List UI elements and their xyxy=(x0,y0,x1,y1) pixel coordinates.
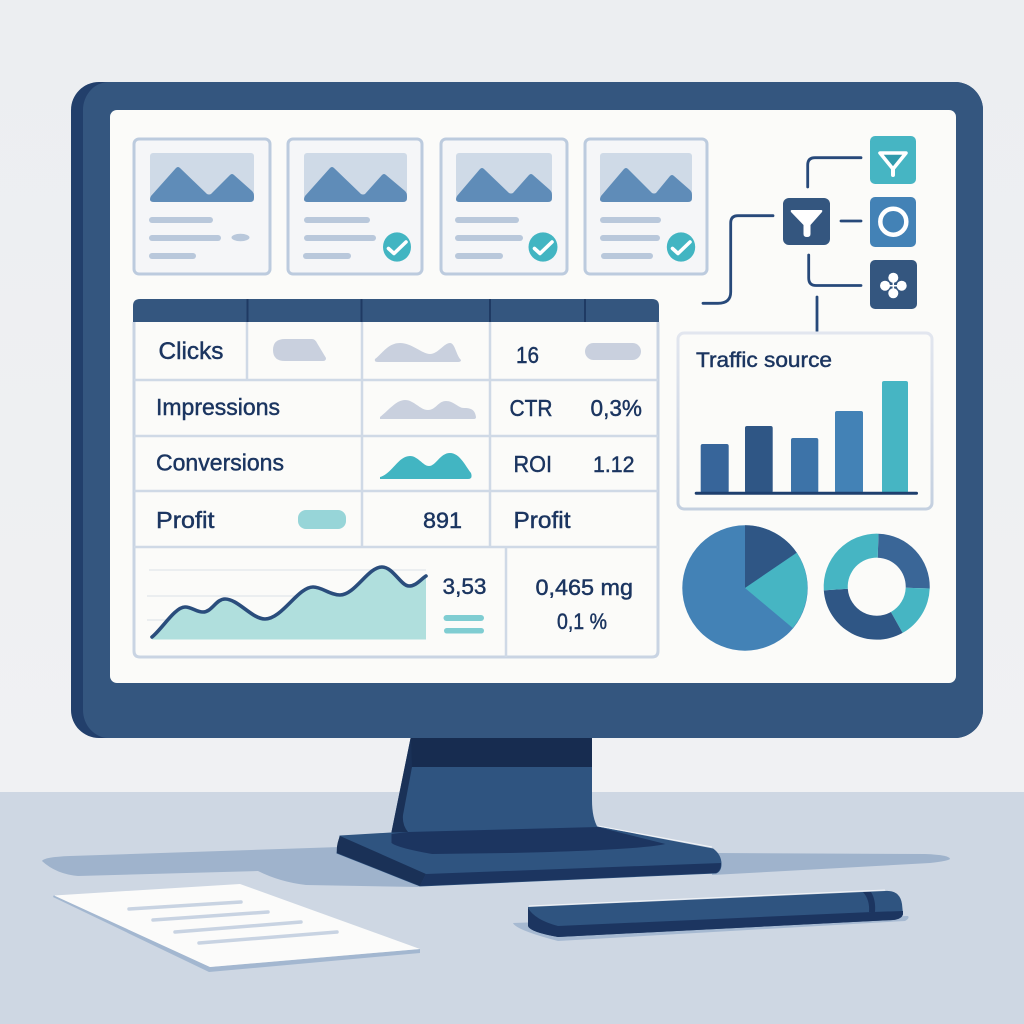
table outline xyxy=(134,322,658,657)
check badge xyxy=(383,232,411,262)
row: Profit: Profit xyxy=(156,507,215,533)
chart axis xyxy=(695,492,918,495)
mountains xyxy=(600,168,692,202)
teal pill xyxy=(298,510,346,529)
check badge xyxy=(528,232,558,262)
row: Profit: Profit xyxy=(514,507,571,533)
teal sparkline xyxy=(380,453,472,479)
icon: teal filter xyxy=(870,136,916,184)
row: Clicks: Clicks xyxy=(158,338,224,365)
row: Profit: 891 xyxy=(423,508,462,533)
text lines xyxy=(455,217,523,259)
pen dark lower side xyxy=(528,908,903,937)
image card 2 xyxy=(288,139,422,274)
mountains xyxy=(304,167,407,202)
row: Profit xyxy=(156,507,571,533)
chart gridlines xyxy=(147,570,426,620)
row: Impressions: CTR xyxy=(510,395,552,421)
text lines xyxy=(149,217,250,259)
stand neck xyxy=(391,736,598,840)
metrics table xyxy=(133,299,659,657)
icon: blue circle xyxy=(870,197,916,247)
row: Conversions: Conversions xyxy=(156,450,284,476)
table grid xyxy=(134,322,658,657)
summary values xyxy=(536,575,633,634)
pen shadow xyxy=(513,916,909,941)
base left face xyxy=(337,836,426,886)
chart area xyxy=(152,567,426,640)
panel: traffic source bar chart xyxy=(678,333,932,509)
text lines xyxy=(600,217,661,259)
image card 1 xyxy=(134,139,270,274)
sparkline xyxy=(375,343,461,362)
chart value xyxy=(442,574,486,634)
base cast shadow xyxy=(392,827,666,854)
legend bars xyxy=(444,615,484,634)
row: Conversions: 1.12 xyxy=(593,452,634,477)
pill placeholder xyxy=(585,343,641,360)
row: Impressions: 0,3% xyxy=(590,395,642,421)
summary values: 0,1 % xyxy=(557,609,607,634)
monitor frame xyxy=(71,82,983,738)
table header bar xyxy=(133,299,659,322)
paper edge xyxy=(53,895,420,972)
chart line xyxy=(152,567,426,637)
sparkline xyxy=(380,400,476,419)
bars xyxy=(701,381,908,493)
pen cap band xyxy=(863,892,875,912)
screen xyxy=(110,110,956,683)
paper document on desk xyxy=(53,884,420,972)
wall background xyxy=(0,0,1024,792)
pen body xyxy=(528,891,903,937)
neck left edge xyxy=(392,736,412,840)
icon: central funnel xyxy=(783,198,830,245)
thumbnail xyxy=(304,153,407,202)
check badge xyxy=(667,232,695,262)
paper sheet xyxy=(54,884,420,967)
connector lines xyxy=(703,158,861,331)
pen on desk xyxy=(513,890,909,941)
funnel flow diagram xyxy=(703,136,917,331)
mountains xyxy=(456,168,552,202)
frame front xyxy=(83,82,983,738)
thumbnail xyxy=(150,153,254,202)
area line chart xyxy=(147,567,426,640)
panel heading: Traffic source xyxy=(696,349,832,372)
row: Conversions xyxy=(156,450,634,479)
header separators xyxy=(248,299,585,322)
pie chart xyxy=(682,525,808,651)
frame back edge xyxy=(71,82,983,738)
desk surface xyxy=(0,792,1024,1024)
row: Conversions: ROI xyxy=(514,451,552,477)
icon: dark network dots xyxy=(870,260,917,309)
base front strip xyxy=(420,863,721,886)
chart value: 3,53 xyxy=(442,574,486,599)
paper text lines xyxy=(129,902,337,943)
desk shadow of monitor xyxy=(42,847,950,887)
donut chart xyxy=(824,534,930,640)
text lines xyxy=(303,217,376,259)
thumbnail xyxy=(600,153,692,202)
row: Impressions xyxy=(156,394,642,421)
row: Clicks xyxy=(158,338,641,368)
image card 4 xyxy=(585,139,707,274)
blob placeholder xyxy=(273,339,326,361)
image card 3 xyxy=(441,139,567,274)
monitor stand xyxy=(337,736,721,886)
mountains xyxy=(150,167,254,202)
neck shadow band xyxy=(408,736,592,767)
summary values: 0,465 mg xyxy=(536,575,633,600)
row: Impressions: Impressions xyxy=(156,394,280,420)
row: Clicks: 16 xyxy=(516,342,539,368)
stand base xyxy=(337,827,721,886)
thumbnail xyxy=(456,153,552,202)
